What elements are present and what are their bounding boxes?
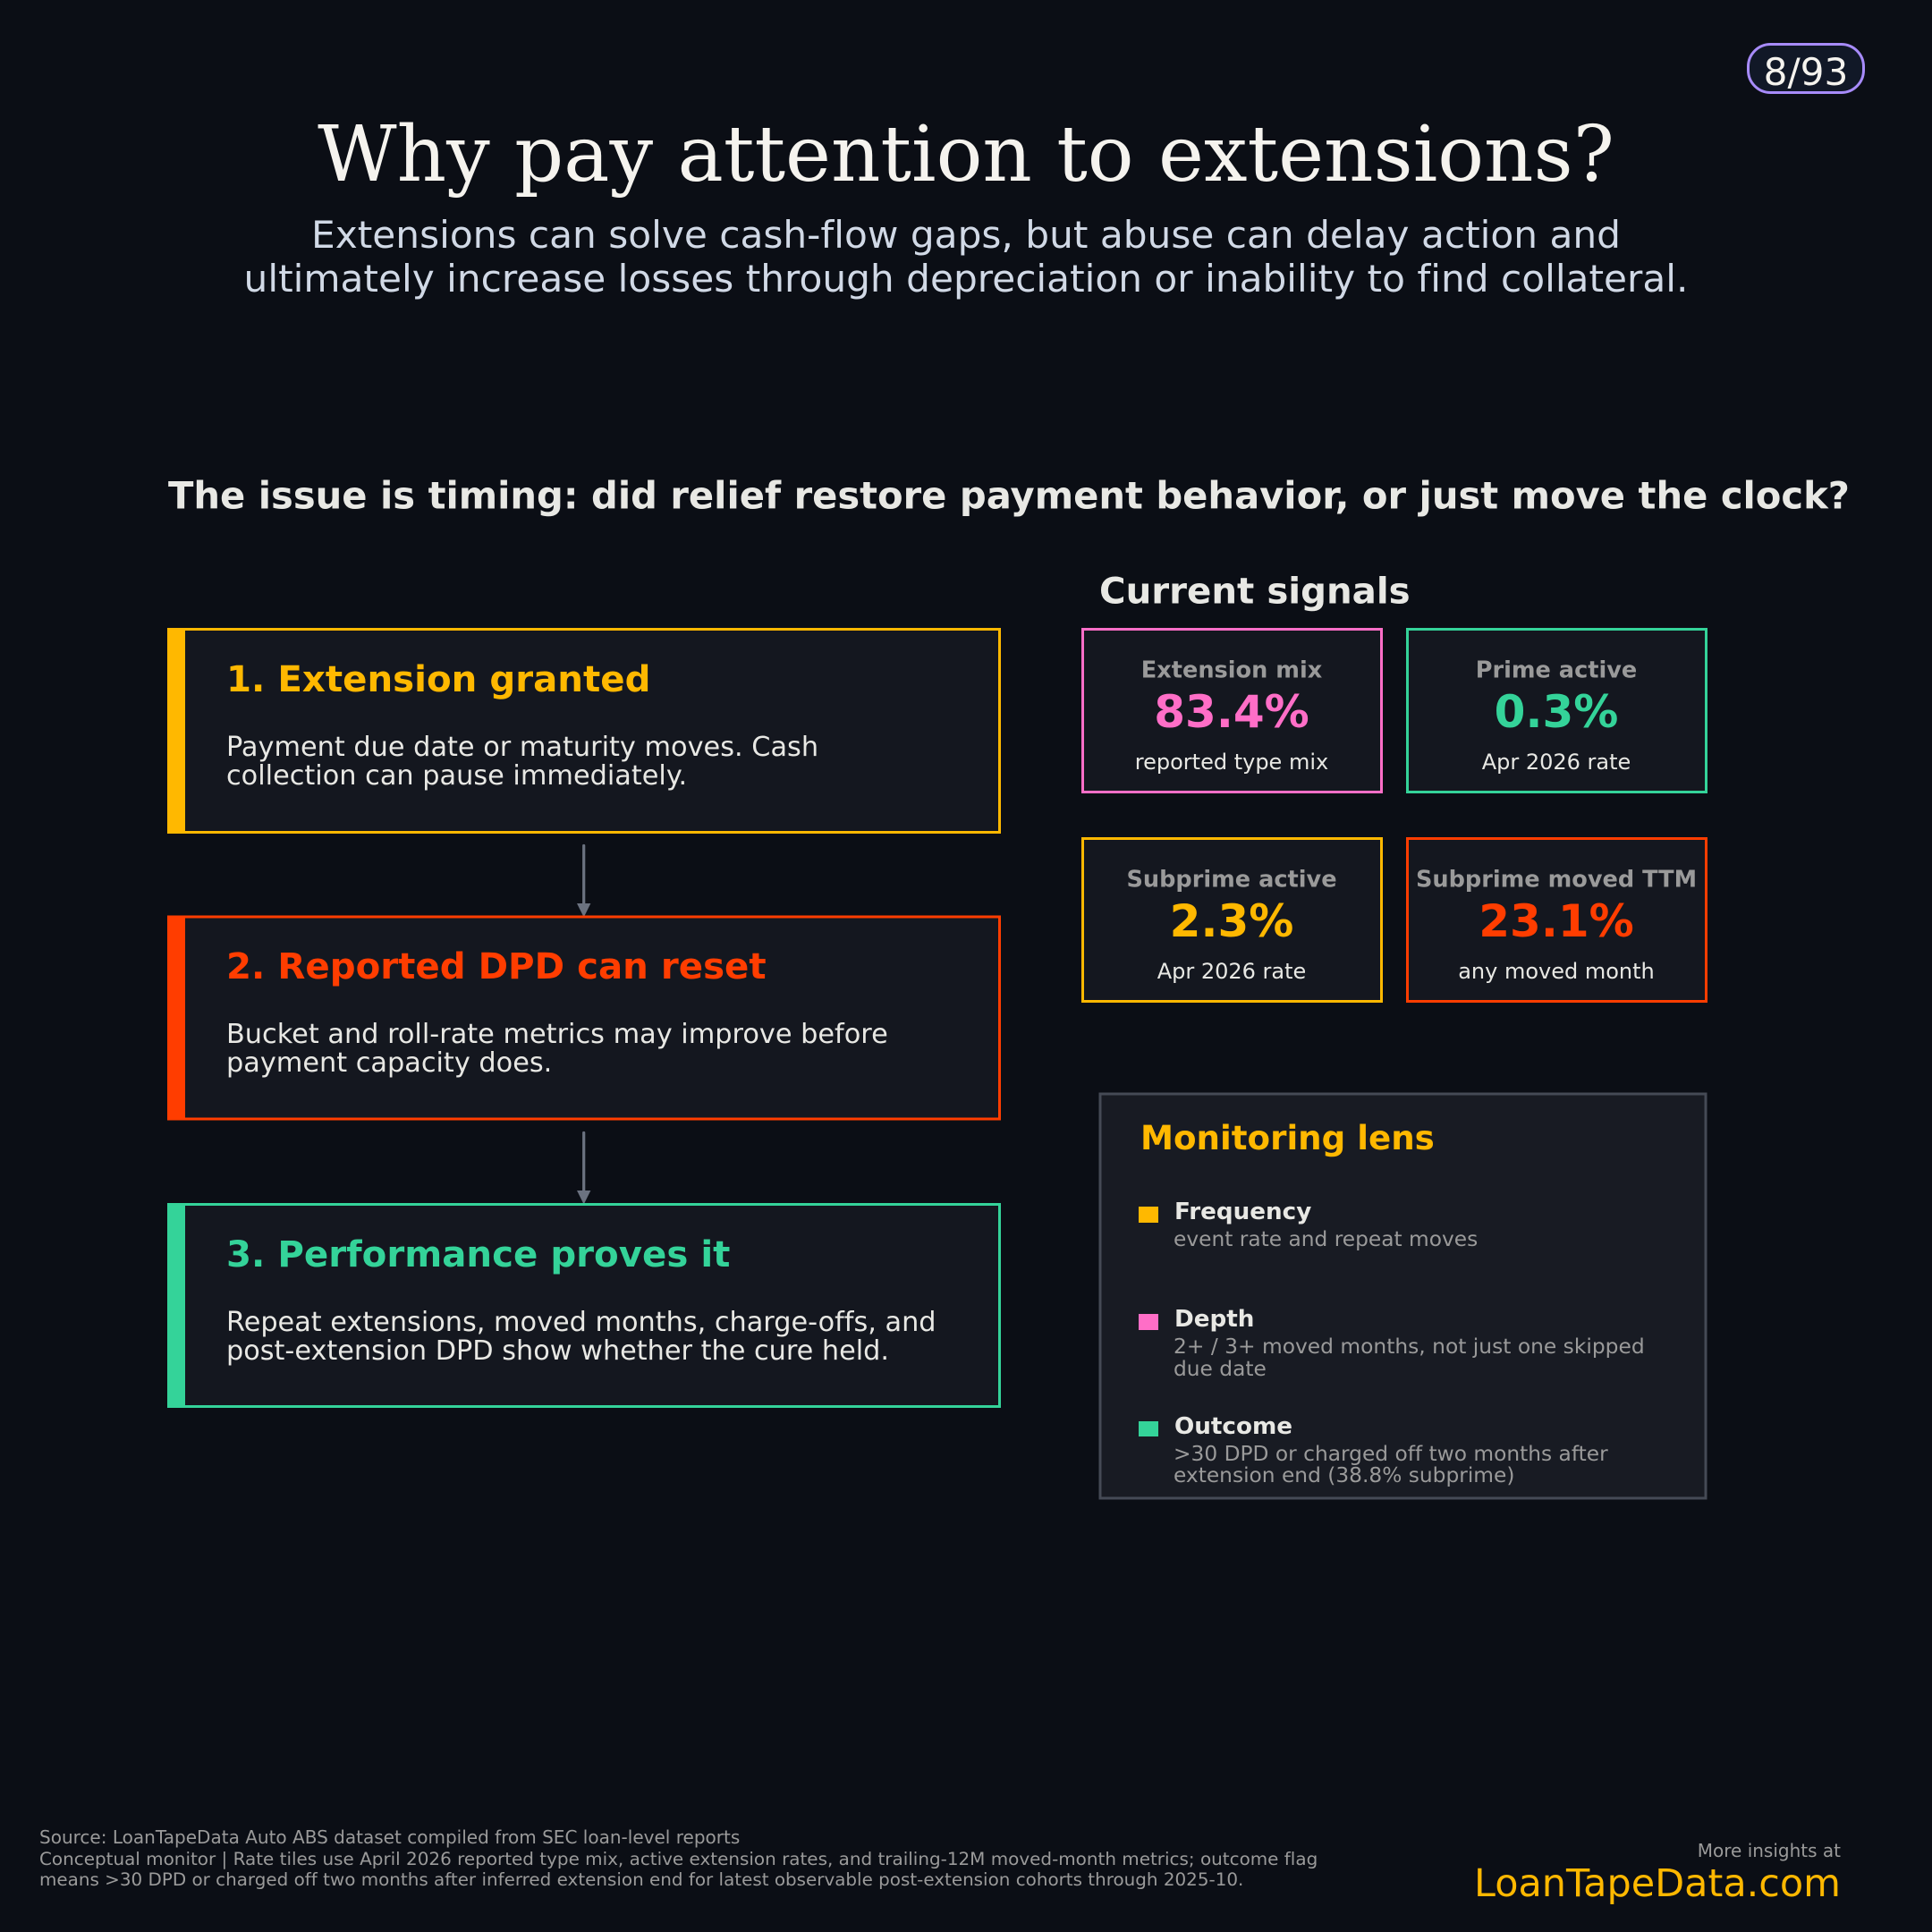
panel: step 2 reported DPD can reset: payment capacity does. [226, 1047, 552, 1079]
panel: step 3 performance proves it [167, 1203, 1000, 1408]
panel: step 1 extension granted: Payment due date or maturity moves. Cash [226, 732, 818, 763]
panel: step 2 reported DPD can reset: Bucket and roll-rate metrics may improve before [226, 1019, 888, 1050]
card: extension mix [1082, 630, 1381, 792]
item: depth: 2+ / 3+ moved months, not just one skipped [1174, 1334, 1645, 1359]
section heading: The issue is timing: did relief restore payment behavior, or just move the clock? [168, 474, 1850, 517]
card: subprime moved TTM: any moved month [1458, 959, 1655, 984]
panel: step 1 extension granted: collection can pause immediately. [226, 760, 687, 792]
arrow: step 1 to step 2 [577, 846, 590, 918]
panel: monitoring lens [1100, 1094, 1706, 1498]
card: subprime active: Apr 2026 rate [1157, 959, 1306, 984]
source footnote: means >30 DPD or charged off two months after inferred extension end for latest observable post-extension cohorts through 2025-10. [39, 1869, 1243, 1890]
card: subprime active: Subprime active [1126, 866, 1337, 893]
item: depth: Depth [1174, 1306, 1254, 1333]
panel: step 1 extension granted [167, 628, 1000, 834]
panel: step 1 extension granted: 1. Extension granted [226, 658, 650, 700]
card: subprime active [1082, 839, 1381, 1002]
monitoring lens heading: Monitoring lens [1140, 1118, 1435, 1157]
item: outcome: Outcome [1174, 1413, 1292, 1440]
panel: step 2 reported DPD can reset: 2. Reported DPD can reset [226, 945, 767, 987]
card: prime active: Apr 2026 rate [1482, 750, 1631, 775]
card: subprime moved TTM [1408, 839, 1707, 1002]
panel: step 3 performance proves it: Repeat extensions, moved months, charge-offs, and [226, 1307, 936, 1338]
card: subprime moved TTM: 23.1% [1479, 895, 1634, 947]
source footnote [39, 1826, 1318, 1890]
brand attribution: More insights at [1698, 1840, 1841, 1861]
current signals heading: Current signals [1099, 571, 1411, 612]
page badge [1748, 45, 1864, 94]
title: Why pay attention to extensions? [318, 110, 1614, 199]
card: prime active: 0.3% [1495, 686, 1618, 738]
item: frequency [1139, 1199, 1478, 1251]
subtitle: Extensions can solve cash-flow gaps, but abuse can delay action and [311, 213, 1621, 257]
item: depth [1139, 1306, 1645, 1381]
brand attribution [1474, 1840, 1841, 1906]
source footnote: Source: LoanTapeData Auto ABS dataset compiled from SEC loan-level reports [39, 1826, 740, 1848]
panel: step 2 reported DPD can reset [167, 916, 1000, 1120]
source footnote: Conceptual monitor | Rate tiles use April 2026 reported type mix, active extension rates, and trailing-12M moved-month metrics; outcome flag [39, 1848, 1318, 1869]
item: frequency: Frequency [1174, 1199, 1311, 1225]
card: extension mix: Extension mix [1141, 657, 1323, 683]
item: frequency: event rate and repeat moves [1174, 1227, 1478, 1251]
card: prime active: Prime active [1476, 657, 1637, 683]
panel: step 3 performance proves it: post-extension DPD show whether the cure held. [226, 1335, 889, 1367]
item: depth: due date [1174, 1357, 1267, 1381]
page badge: 8/93 [1764, 50, 1848, 94]
subtitle: ultimately increase losses through depreciation or inability to find collateral. [244, 257, 1688, 301]
card: subprime active: 2.3% [1170, 895, 1293, 947]
card: extension mix: reported type mix [1135, 750, 1328, 775]
card: extension mix: 83.4% [1154, 686, 1309, 738]
card: subprime moved TTM: Subprime moved TTM [1416, 866, 1697, 893]
arrow: step 2 to step 3 [577, 1132, 590, 1204]
item: outcome [1139, 1413, 1608, 1487]
item: outcome: >30 DPD or charged off two months after [1174, 1442, 1608, 1466]
subtitle [244, 213, 1688, 301]
card: prime active [1408, 630, 1707, 792]
panel: step 3 performance proves it: 3. Performance proves it [226, 1233, 730, 1275]
item: outcome: extension end (38.8% subprime) [1174, 1463, 1514, 1487]
brand attribution: LoanTapeData.com [1474, 1861, 1841, 1906]
